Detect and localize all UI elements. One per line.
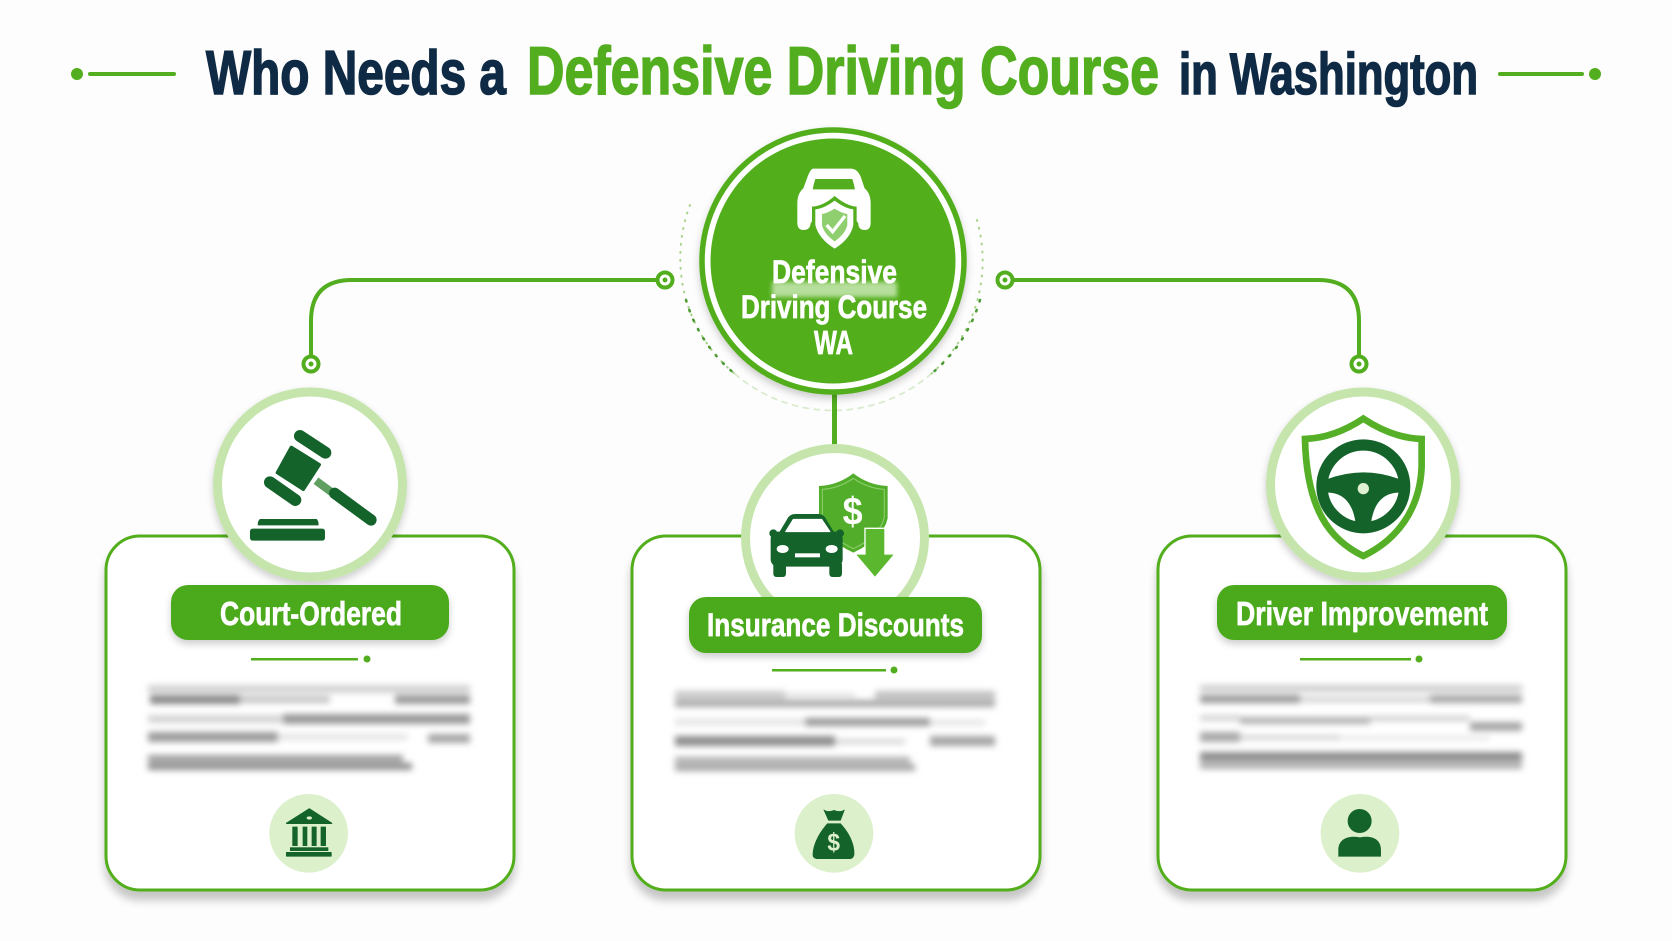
icon: steering wheel in shield bbox=[1305, 419, 1422, 556]
divider bbox=[772, 666, 898, 674]
title ornament: left bbox=[71, 68, 176, 80]
badge label bbox=[741, 254, 927, 361]
blurred text block bbox=[148, 685, 470, 770]
card bbox=[106, 536, 514, 890]
divider bbox=[1300, 656, 1422, 662]
highlight under defensive bbox=[772, 282, 897, 297]
title bbox=[71, 33, 1601, 109]
title text: who needs a: Who Needs a bbox=[206, 39, 506, 108]
panel: center badge bbox=[702, 130, 964, 392]
pill label bbox=[1217, 585, 1507, 640]
title text: defensive driving course: Defensive Driving Course bbox=[527, 33, 1159, 109]
pill label: Court-Ordered bbox=[220, 595, 402, 632]
badge disc and ring bbox=[702, 130, 964, 392]
badge label: Defensive bbox=[772, 254, 897, 290]
title text: in washington: in Washington bbox=[1179, 42, 1478, 107]
panel: court-ordered bbox=[106, 392, 514, 890]
card bbox=[1158, 536, 1566, 890]
divider bbox=[251, 656, 370, 662]
icon: car, shield and down arrow bbox=[769, 473, 895, 578]
pill label bbox=[171, 585, 449, 640]
icon: gavel bbox=[250, 436, 371, 541]
title ornament: right bbox=[1498, 68, 1601, 80]
dotted orbit around center badge bbox=[680, 205, 983, 410]
blurred text block bbox=[675, 691, 995, 771]
icon: car, shield and down arrow: $ bbox=[843, 490, 863, 534]
icon circle bbox=[218, 392, 402, 577]
icon circle bbox=[746, 448, 924, 628]
pill label: Driver Improvement bbox=[1236, 595, 1488, 632]
badge label: WA bbox=[814, 324, 853, 361]
panel: insurance discounts bbox=[632, 448, 1040, 890]
connector: center to left bbox=[304, 272, 672, 372]
icon: money bag: $ bbox=[827, 830, 840, 857]
panel: driver improvement bbox=[1158, 392, 1566, 890]
pill label: Insurance Discounts bbox=[707, 607, 964, 643]
badge label: Driving Course bbox=[741, 289, 927, 325]
icon: person bbox=[1321, 794, 1399, 873]
connector: center to middle card bbox=[832, 390, 837, 452]
blurred text block bbox=[1200, 685, 1522, 769]
icon: car with shield bbox=[797, 169, 871, 253]
icon: courthouse bbox=[269, 794, 348, 873]
card bbox=[632, 536, 1040, 890]
icon circle bbox=[1270, 392, 1456, 577]
icon: money bag bbox=[795, 794, 873, 873]
connector: center to right bbox=[998, 272, 1366, 372]
pill label bbox=[689, 597, 982, 653]
